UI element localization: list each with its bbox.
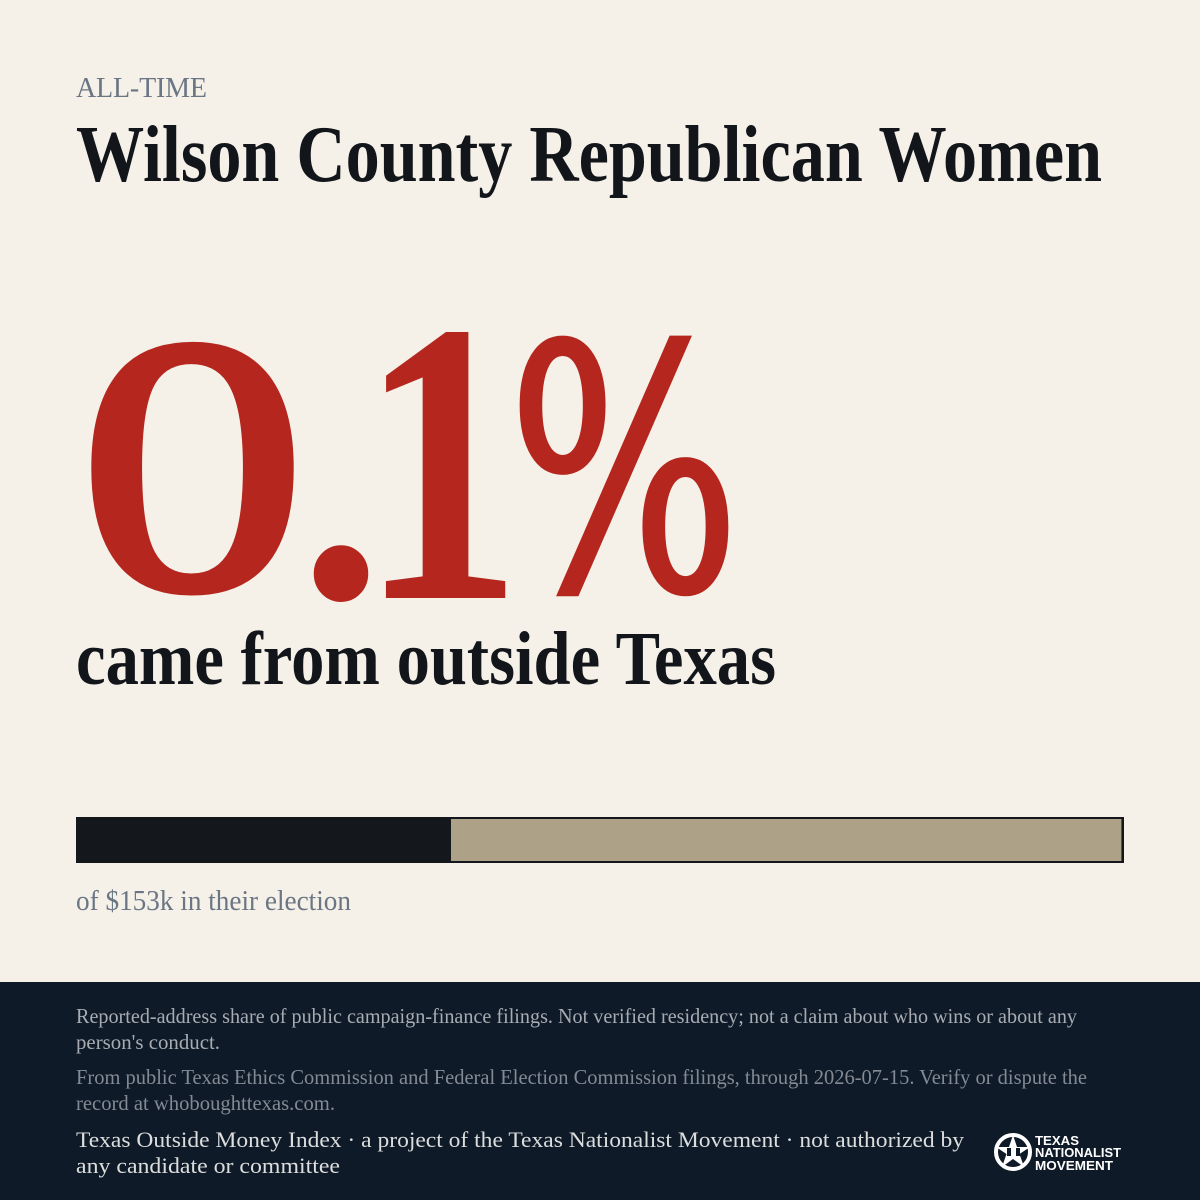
logo: Texas Nationalist Movement: MOVEMENT bbox=[1035, 1158, 1113, 1173]
hero figure: 0.1%: 1 bbox=[360, 240, 522, 686]
attribution text: Texas Outside Money Index · a project of the Texas Nationalist Movement · not authorized by bbox=[76, 1127, 964, 1152]
hero figure: 0.1%: . bbox=[299, 285, 383, 673]
hero figure: 0.1% bbox=[79, 240, 740, 686]
bar caption: of $153k in their election bbox=[76, 885, 351, 917]
source text: From public Texas Ethics Commission and Federal Election Commission filings, through 2026-07-15. Verify or dispute the bbox=[76, 1065, 1087, 1089]
footer panel bbox=[0, 982, 1200, 1200]
source text: record at whoboughttexas.com. bbox=[76, 1091, 335, 1115]
attribution text bbox=[76, 1127, 964, 1178]
logo: Texas Nationalist Movement: NATIONALIST bbox=[1035, 1145, 1121, 1160]
logo: Texas Nationalist Movement bbox=[996, 1133, 1121, 1173]
attribution text: any candidate or committee bbox=[76, 1153, 340, 1178]
hero figure: 0.1%: % bbox=[508, 275, 740, 669]
hero figure: 0.1%: 0 bbox=[79, 264, 306, 667]
disclaimer text: Reported-address share of public campaign-finance filings. Not verified residency; not a claim about who wins or about any bbox=[76, 1004, 1077, 1028]
source text bbox=[76, 1065, 1087, 1115]
hero subtitle: came from outside Texas bbox=[76, 617, 776, 701]
share bar bbox=[76, 817, 1124, 863]
logo: Texas Nationalist Movement: TEXAS bbox=[1035, 1133, 1079, 1148]
disclaimer text: person's conduct. bbox=[76, 1030, 220, 1054]
disclaimer text bbox=[76, 1004, 1077, 1054]
eyebrow label: ALL-TIME bbox=[76, 73, 207, 104]
